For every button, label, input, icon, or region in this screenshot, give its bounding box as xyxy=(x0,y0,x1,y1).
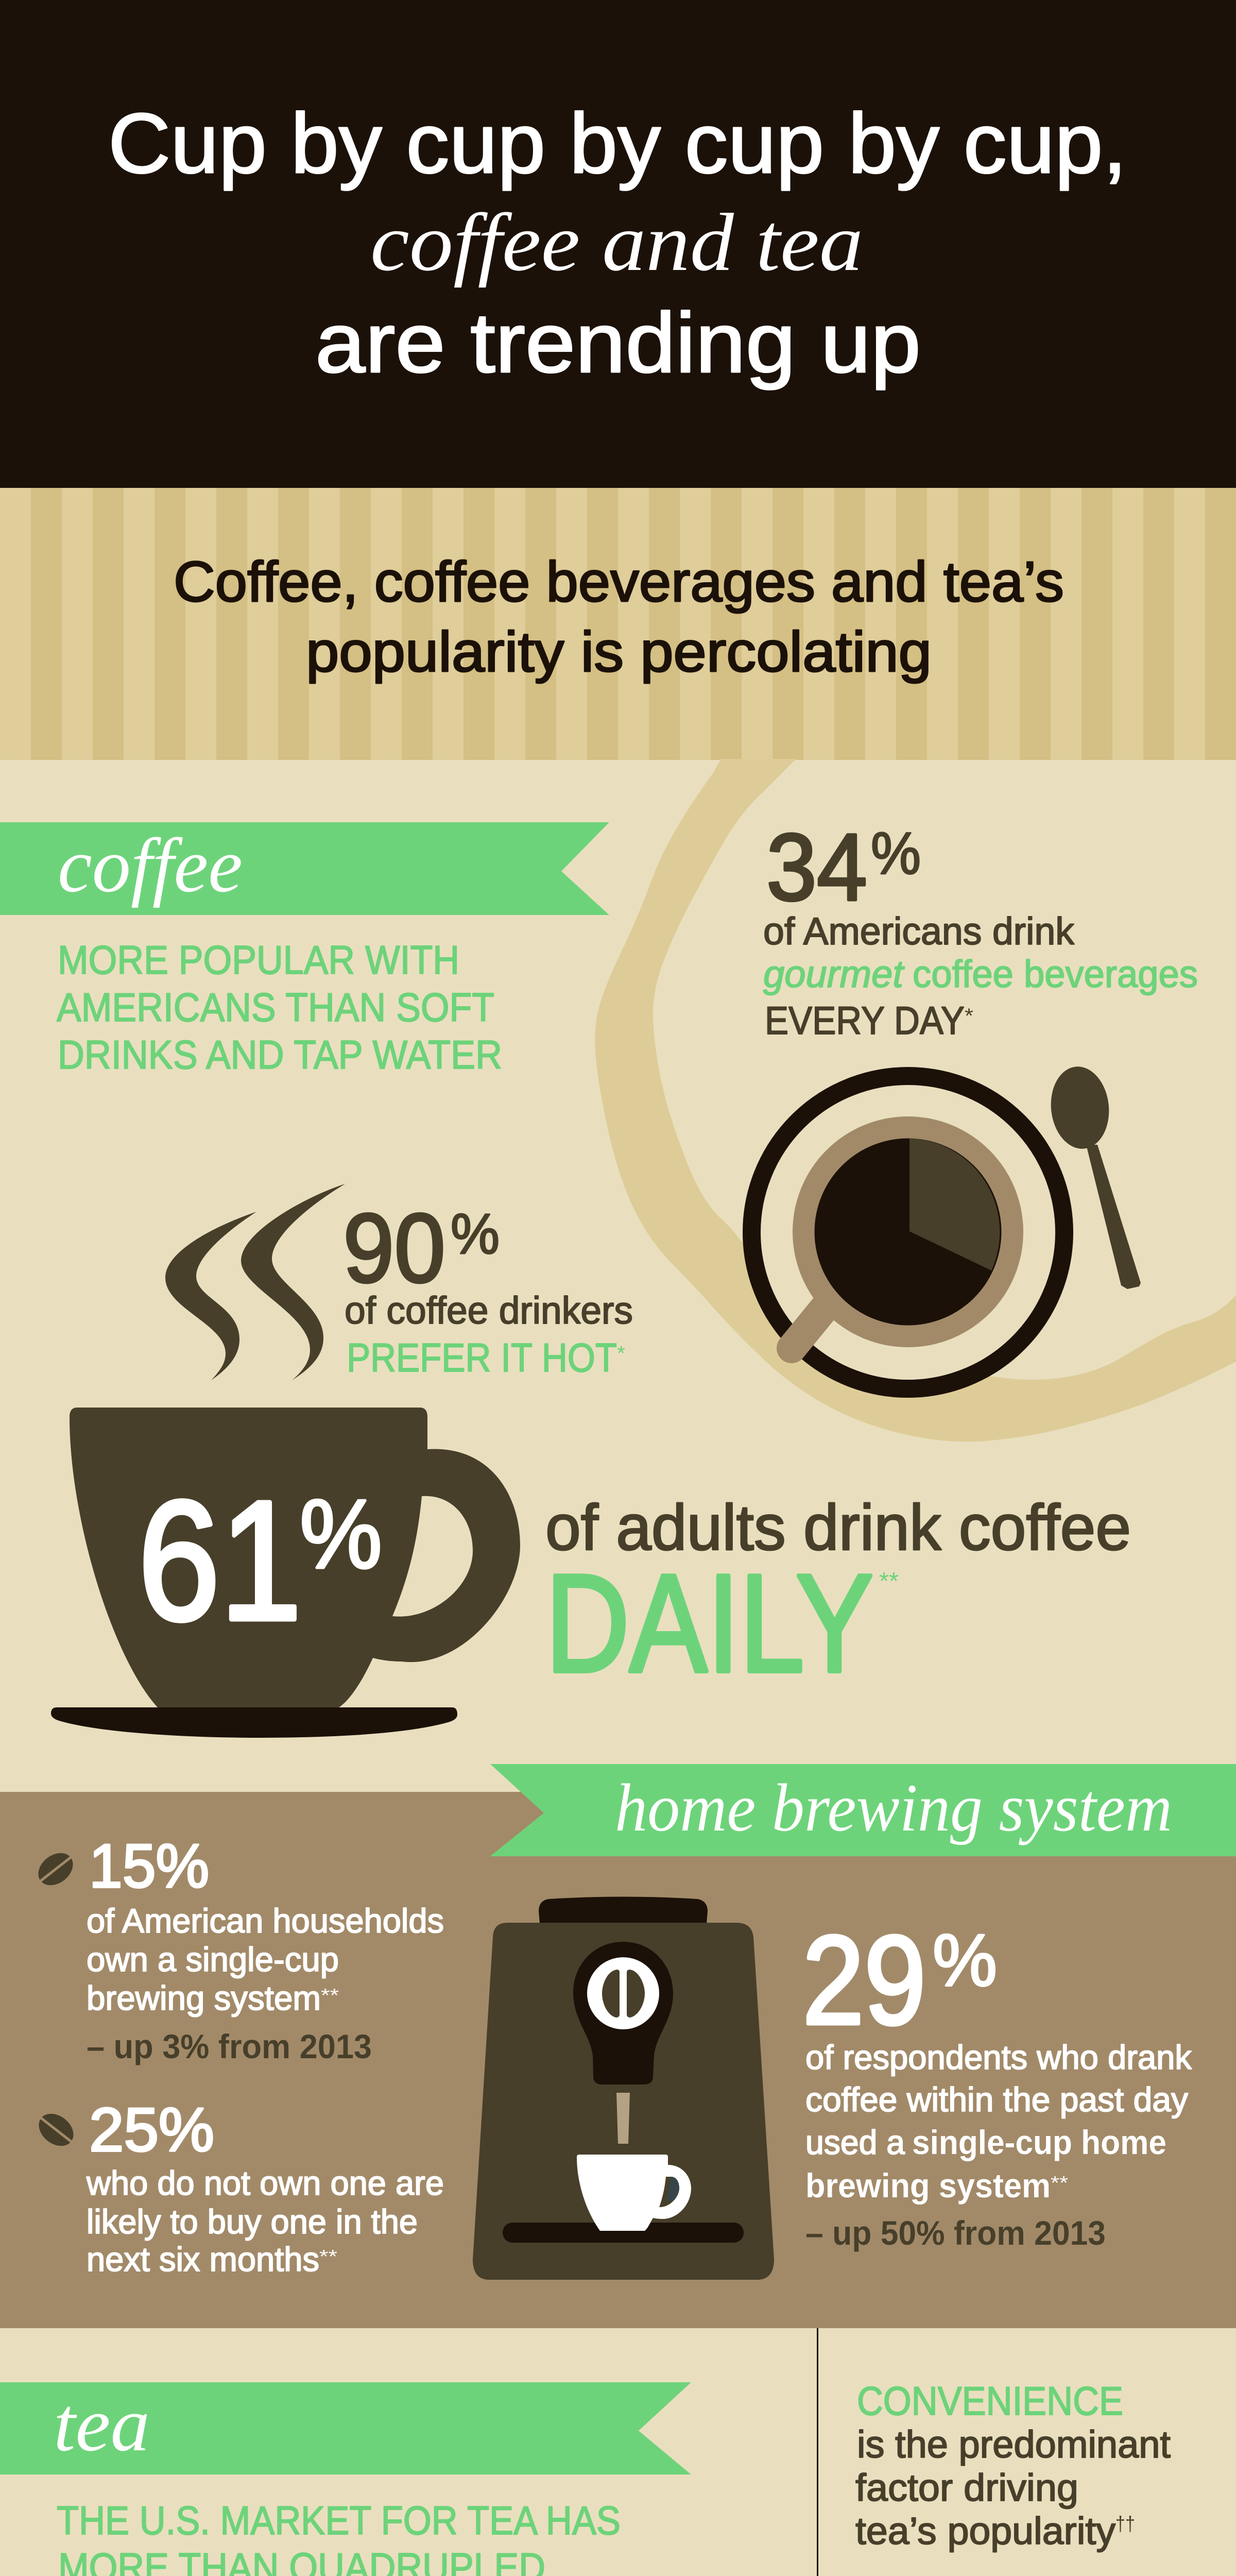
stat: 90 percent: PREFER IT HOT xyxy=(347,1335,617,1380)
stat: 34 percent: % xyxy=(871,821,921,887)
machine bean logo xyxy=(587,1957,659,2029)
stat: 25 percent: who do not own one are xyxy=(86,2164,444,2202)
stat: 90 percent: of coffee drinkers xyxy=(345,1289,633,1332)
stat: 29 percent: ** xyxy=(1051,2172,1068,2193)
stat: 29 percent: 29 xyxy=(802,1909,926,2050)
mug saucer xyxy=(51,1707,457,1738)
icon: coffee bean two xyxy=(31,2106,81,2154)
stat: 29 percent: brewing system xyxy=(805,2166,1051,2205)
stat: 34 percent: 34 xyxy=(766,815,867,921)
callout: convenience: tea’s popularity xyxy=(855,2510,1115,2552)
callout: more popular: DRINKS AND TAP WATER xyxy=(58,1032,502,1077)
mug number: 61 xyxy=(138,1465,302,1655)
stat: 34 percent: gourmet xyxy=(763,953,905,995)
stat: 29 percent: – up 50% from 2013 xyxy=(805,2214,1106,2252)
stat: 29 percent: of respondents who drank xyxy=(805,2038,1192,2076)
stat: adults drink coffee daily: DAILY xyxy=(545,1546,873,1701)
callout: more popular xyxy=(57,937,502,1077)
ribbon: coffee xyxy=(0,822,609,915)
stat: 25 percent: next six months xyxy=(87,2240,319,2278)
stat: 25 percent: likely to buy one in the xyxy=(87,2202,418,2241)
stat: 29 percent: % xyxy=(933,1920,997,2002)
stat: 29 percent: coffee within the past day xyxy=(805,2080,1188,2119)
stat: 90 percent: * xyxy=(617,1342,625,1365)
stat: 15 percent: brewing system xyxy=(87,1979,321,2017)
white cup xyxy=(577,2155,691,2231)
machine head xyxy=(573,1942,673,2084)
callout: convenience: †† xyxy=(1115,2513,1135,2535)
icon: tea bag xyxy=(770,2328,866,2576)
subheading line one: Coffee, coffee beverages and tea’s xyxy=(174,550,1064,614)
callout: more popular: AMERICANS THAN SOFT xyxy=(57,985,494,1030)
stat: 15 percent xyxy=(87,1832,444,2065)
callout: convenience: is the predominant xyxy=(857,2423,1171,2466)
coffee stream xyxy=(616,2093,630,2144)
stat: 29 percent xyxy=(802,1909,1192,2252)
icon: steam xyxy=(165,1184,345,1380)
stat: 90 percent: % xyxy=(451,1202,500,1266)
stat: 34 percent: of Americans drink xyxy=(763,910,1075,953)
stat: adults drink coffee daily xyxy=(545,1492,1131,1701)
title line two handwritten: coffee and tea xyxy=(370,196,863,288)
stat: 25 percent xyxy=(86,2095,444,2278)
stat: 15 percent: of American households xyxy=(87,1902,444,1940)
stat: 34 percent xyxy=(763,815,1198,1043)
stat: 25 percent: 25% xyxy=(89,2095,214,2164)
ribbon label: tea xyxy=(54,2382,150,2467)
coffee ring stain xyxy=(595,759,1236,1442)
stat: 34 percent: coffee beverages xyxy=(913,953,1198,995)
striped subheading band xyxy=(0,488,1236,760)
icon: mug with 61 percent xyxy=(51,1408,520,1738)
stat: 29 percent: single-cup home xyxy=(912,2123,1166,2161)
ribbon label: coffee xyxy=(58,823,243,908)
icon: brewing machine xyxy=(473,1897,774,2280)
cup handle shadow xyxy=(666,2177,679,2201)
stat: 29 percent: used a xyxy=(805,2123,905,2161)
panel: home brewing system xyxy=(0,1764,1236,2328)
icon: mug with 61 percent: % xyxy=(300,1480,382,1589)
callout: convenience xyxy=(855,2378,1171,2552)
subheading line two: popularity is percolating xyxy=(306,620,932,684)
ribbon label: home brewing system xyxy=(615,1770,1172,1845)
stat: 90 percent xyxy=(343,1194,633,1380)
ribbon: home brewing system xyxy=(490,1764,1236,1856)
title line three: are trending up xyxy=(315,295,921,390)
icon: coffee bean one xyxy=(31,1845,80,1893)
ribbon: tea xyxy=(0,2382,691,2475)
icon: spoon xyxy=(1047,1064,1141,1289)
stat: adults drink coffee daily: ** xyxy=(879,1568,899,1595)
stat: 15 percent: 15% xyxy=(89,1832,209,1901)
callout: U.S. tea market: THE U.S. MARKET FOR TEA HAS xyxy=(57,2498,621,2543)
stat: 90 percent: 90 xyxy=(343,1194,445,1303)
callout: U.S. tea market xyxy=(57,2498,621,2576)
stat: 34 percent: EVERY DAY xyxy=(765,999,965,1043)
icon: coffee cup from above xyxy=(752,1076,1064,1389)
stat: 15 percent: ** xyxy=(321,1985,339,2006)
stat: 15 percent: own a single-cup xyxy=(87,1940,339,1978)
stat: adults drink coffee daily: of adults drink coffee xyxy=(545,1492,1131,1564)
callout: convenience: factor driving xyxy=(855,2466,1078,2509)
header panel xyxy=(0,0,1236,488)
title line one: Cup by cup by cup by cup, xyxy=(108,96,1127,191)
drip tray xyxy=(503,2223,744,2243)
callout: convenience: CONVENIENCE xyxy=(857,2378,1123,2424)
callout: more popular: MORE POPULAR WITH xyxy=(58,937,459,982)
stat: 15 percent: – up 3% from 2013 xyxy=(87,2027,372,2065)
stat: 34 percent: * xyxy=(965,1005,973,1027)
stat: 25 percent: ** xyxy=(319,2246,337,2267)
